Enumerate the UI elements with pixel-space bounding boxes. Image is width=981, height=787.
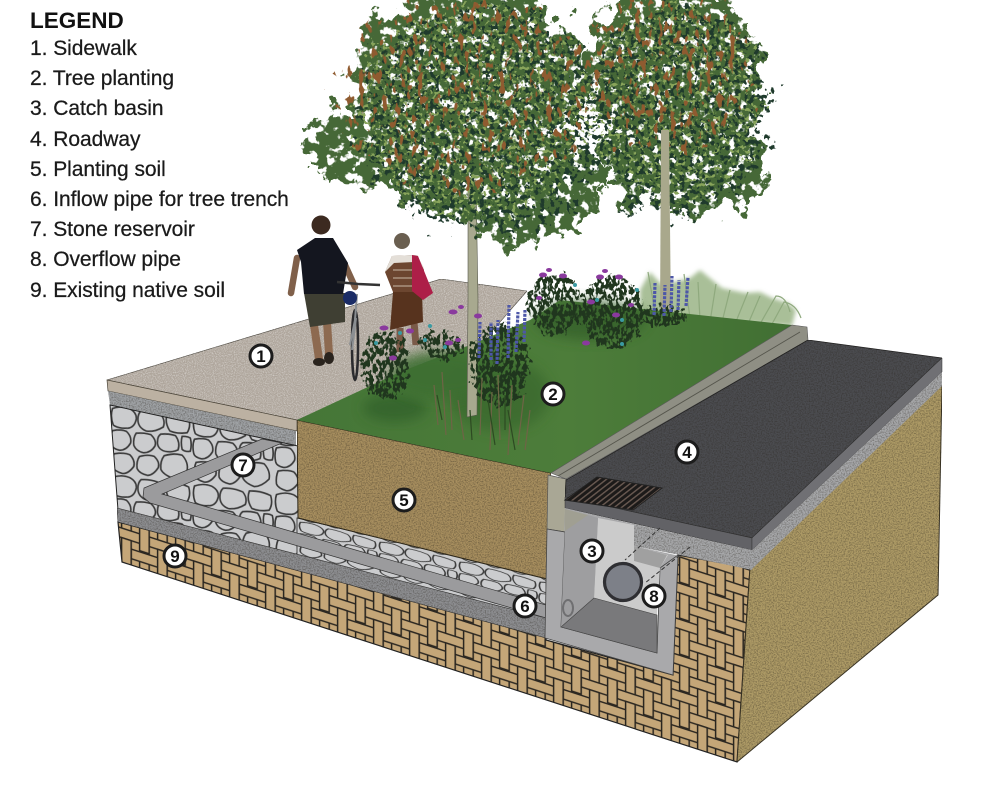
legend bbox=[30, 8, 289, 302]
legend title: LEGEND bbox=[30, 8, 124, 33]
tree 1 light leaves bbox=[355, 5, 595, 215]
inflow pipe for tree trench bbox=[143, 439, 546, 618]
tree 1 foliage base bbox=[310, 0, 602, 243]
bicycle wheel bbox=[352, 310, 358, 380]
roadway asphalt top bbox=[565, 340, 942, 538]
marker 8: 8 bbox=[649, 587, 659, 606]
legend item 4: 4. Roadway bbox=[30, 128, 141, 151]
legend item 1: 1. Sidewalk bbox=[30, 37, 137, 60]
tree 2 foliage base bbox=[587, 0, 767, 215]
legend item 5: 5. Planting soil bbox=[30, 158, 166, 181]
planting soil face bbox=[297, 420, 551, 579]
stone reservoir left face bbox=[110, 405, 298, 562]
woman shirt stripes bbox=[393, 270, 416, 286]
woman bag bbox=[412, 255, 433, 300]
dashed pipe lines bbox=[625, 528, 690, 583]
teal buds bbox=[374, 283, 639, 349]
lawn shading under plants bbox=[363, 300, 645, 431]
small pipe mark bbox=[563, 600, 573, 616]
tree 2 dark leaves bbox=[590, 5, 770, 215]
man shirt bbox=[297, 238, 348, 294]
legend item 3: 3. Catch basin bbox=[30, 97, 164, 120]
marker 8 bbox=[643, 585, 665, 607]
woman shorts bbox=[390, 292, 423, 330]
planting beds bbox=[361, 268, 688, 455]
marker 2: 2 bbox=[548, 385, 558, 404]
marker 5 bbox=[393, 489, 415, 511]
man walking bbox=[291, 216, 355, 366]
marker 1: 1 bbox=[256, 347, 266, 366]
right side soil face bbox=[737, 385, 942, 762]
legend item 6: 6. Inflow pipe for tree trench bbox=[30, 188, 289, 211]
handlebar bbox=[337, 282, 380, 285]
man arms bbox=[291, 258, 355, 293]
legend item 9: 9. Existing native soil bbox=[30, 279, 225, 302]
marker 1 bbox=[250, 345, 272, 367]
bicycle frame bbox=[350, 294, 357, 350]
marker 9 bbox=[164, 545, 186, 567]
overflow pipe opening bbox=[604, 564, 642, 600]
marker 4 bbox=[676, 441, 698, 463]
woman shoulders bbox=[385, 255, 424, 272]
numbered markers bbox=[164, 345, 698, 617]
tree 2 canopy (rear) bbox=[587, 0, 770, 215]
man shorts bbox=[304, 293, 345, 327]
meadow grass behind lawn bbox=[640, 270, 801, 326]
basin backing bbox=[562, 508, 680, 628]
purple flowers bbox=[380, 268, 634, 360]
stone reservoir strip beneath planting soil bbox=[297, 518, 546, 620]
marker 3 bbox=[581, 540, 603, 562]
marker 3: 3 bbox=[587, 542, 597, 561]
basin back wall bbox=[594, 518, 668, 615]
plant stem clumps bbox=[361, 273, 687, 407]
catch basin grate bbox=[565, 477, 662, 510]
tree 1 canopy bbox=[310, 0, 610, 243]
marker 2 bbox=[542, 383, 564, 405]
man legs bbox=[314, 322, 329, 359]
blue flower spires bbox=[479, 276, 688, 364]
fine gravel layer bbox=[117, 508, 546, 638]
woman walking bbox=[385, 233, 433, 352]
tree 1 seed clusters bbox=[340, 0, 590, 190]
marker 7 bbox=[232, 454, 254, 476]
woman head bbox=[394, 233, 410, 249]
curb bbox=[547, 325, 808, 532]
legend item 8: 8. Overflow pipe bbox=[30, 248, 181, 271]
legend item 7: 7. Stone reservoir bbox=[30, 218, 195, 241]
tree 2 trunk bbox=[660, 130, 671, 320]
tree 2 seed clusters bbox=[590, 0, 750, 150]
legend item 2: 2. Tree planting bbox=[30, 67, 174, 90]
sidewalk top surface bbox=[107, 279, 527, 420]
basin outer concrete bbox=[545, 529, 678, 675]
marker 7: 7 bbox=[238, 456, 248, 475]
basin left wall bbox=[561, 515, 598, 627]
tree 1 trunk bbox=[467, 180, 478, 417]
marker 6 bbox=[514, 595, 536, 617]
man shoes bbox=[313, 352, 334, 366]
roadway edges bbox=[565, 358, 942, 570]
road base gravel layer under sidewalk bbox=[108, 391, 296, 446]
marker 9: 9 bbox=[170, 547, 180, 566]
woman shirt bbox=[385, 255, 424, 292]
basin floor bbox=[561, 598, 657, 653]
bicycle bag bbox=[343, 291, 357, 305]
sidewalk front edge bbox=[107, 380, 297, 431]
lawn planting surface bbox=[297, 300, 792, 473]
basin rear slab bbox=[634, 546, 667, 568]
basin top lip bbox=[565, 509, 588, 531]
marker 6: 6 bbox=[520, 597, 530, 616]
grass tufts at tree base bbox=[434, 372, 530, 455]
native soil basket weave front bbox=[118, 522, 750, 762]
marker 5: 5 bbox=[399, 491, 409, 510]
woman legs bbox=[400, 322, 416, 352]
tree 1 dark leaves bbox=[360, 8, 610, 232]
man head bbox=[312, 216, 330, 234]
marker 4: 4 bbox=[682, 443, 692, 462]
bicycle bbox=[337, 282, 380, 380]
tree 2 light leaves bbox=[590, 0, 760, 200]
catch basin bbox=[545, 508, 690, 675]
